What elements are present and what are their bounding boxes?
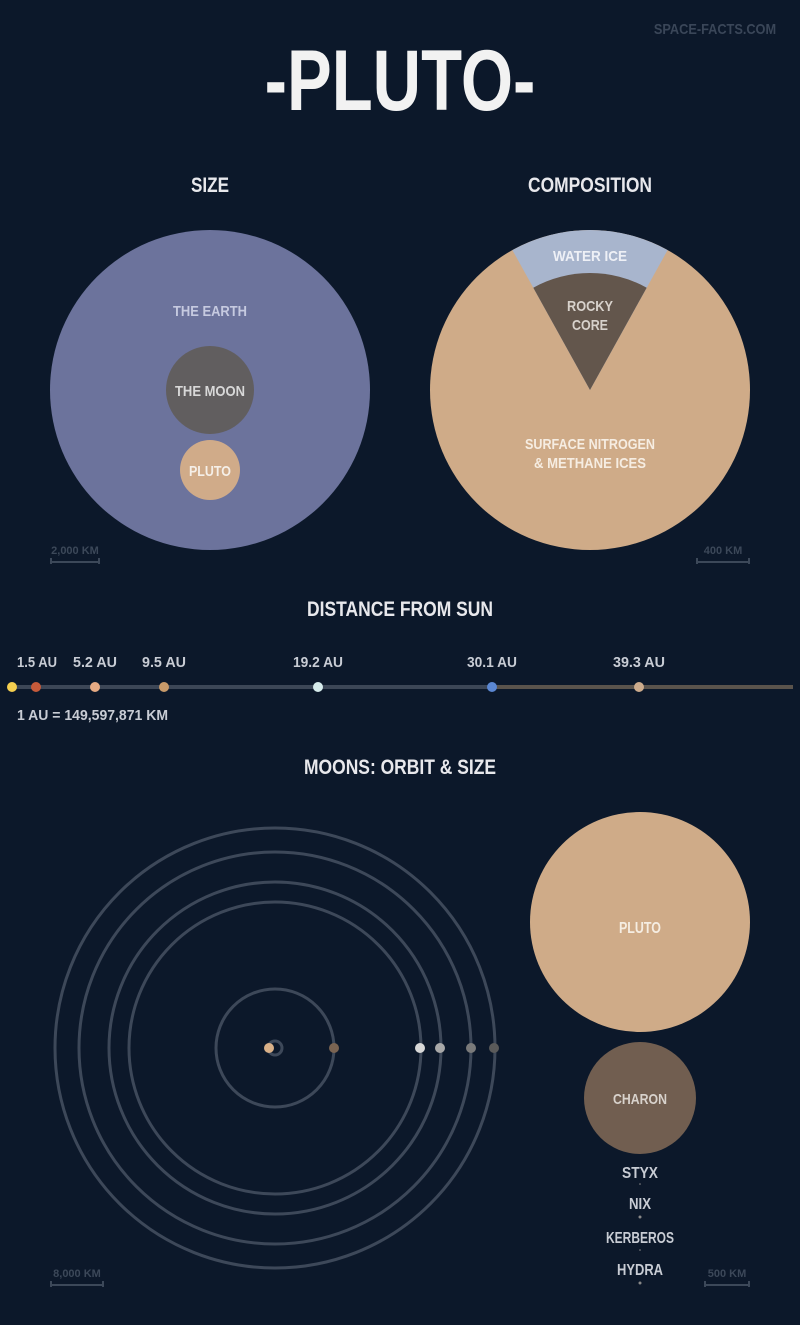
distance line: 30.1 AU [467, 654, 517, 671]
moon size: pluto: PLUTO [619, 920, 661, 937]
rocky core [533, 273, 647, 390]
surface ices: SURFACE NITROGEN [525, 436, 655, 453]
water ice layer [512, 230, 668, 390]
size comparison [50, 230, 370, 550]
title: -PLUTO- [265, 33, 535, 129]
heading: size: SIZE [191, 174, 229, 197]
scale: 500 km: 500 KM [708, 1268, 746, 1280]
scale: 2000 km: 2,000 KM [51, 545, 99, 557]
small moons: HYDRA [617, 1262, 663, 1279]
site credit: SPACE-FACTS.COM [654, 20, 776, 37]
surface ices: & METHANE ICES [534, 455, 646, 472]
scale: 500 km [705, 1268, 749, 1287]
heading: composition: COMPOSITION [528, 174, 652, 197]
heading: moons: MOONS: ORBIT & SIZE [304, 756, 496, 779]
distance line: 1.5 AU [17, 654, 57, 671]
AU note: 1 AU = 149,597,871 KM [17, 707, 168, 724]
pluto: PLUTO [189, 463, 231, 480]
scale: 8000 km [51, 1268, 103, 1287]
small moons: NIX [629, 1196, 651, 1213]
surface ices [525, 436, 655, 472]
earth [50, 230, 370, 550]
distance line [7, 654, 793, 692]
moon [166, 346, 254, 434]
small moons: STYX [622, 1165, 658, 1182]
rocky core: CORE [572, 317, 608, 334]
distance line: 9.5 AU [142, 654, 186, 671]
moon size: charon: CHARON [613, 1091, 667, 1108]
small moons: KERBEROS [606, 1230, 674, 1247]
composition chart [430, 230, 750, 550]
rocky core: ROCKY [567, 298, 613, 315]
pluto [180, 440, 240, 500]
orbit diagram [55, 828, 499, 1268]
scale: 8000 km: 8,000 KM [53, 1268, 101, 1280]
water ice layer: WATER ICE [553, 248, 627, 265]
distance line: 5.2 AU [73, 654, 117, 671]
scale: 2000 km [51, 545, 99, 564]
distance line: 39.3 AU [613, 654, 665, 671]
moon size: pluto [530, 812, 750, 1032]
small moons [606, 1165, 674, 1284]
heading: distance: DISTANCE FROM SUN [307, 598, 493, 621]
moon size: charon [584, 1042, 696, 1154]
scale: 400 km [697, 545, 749, 564]
distance line: 19.2 AU [293, 654, 343, 671]
moon: THE MOON [175, 383, 245, 400]
earth: THE EARTH [173, 303, 247, 320]
scale: 400 km: 400 KM [704, 545, 742, 557]
